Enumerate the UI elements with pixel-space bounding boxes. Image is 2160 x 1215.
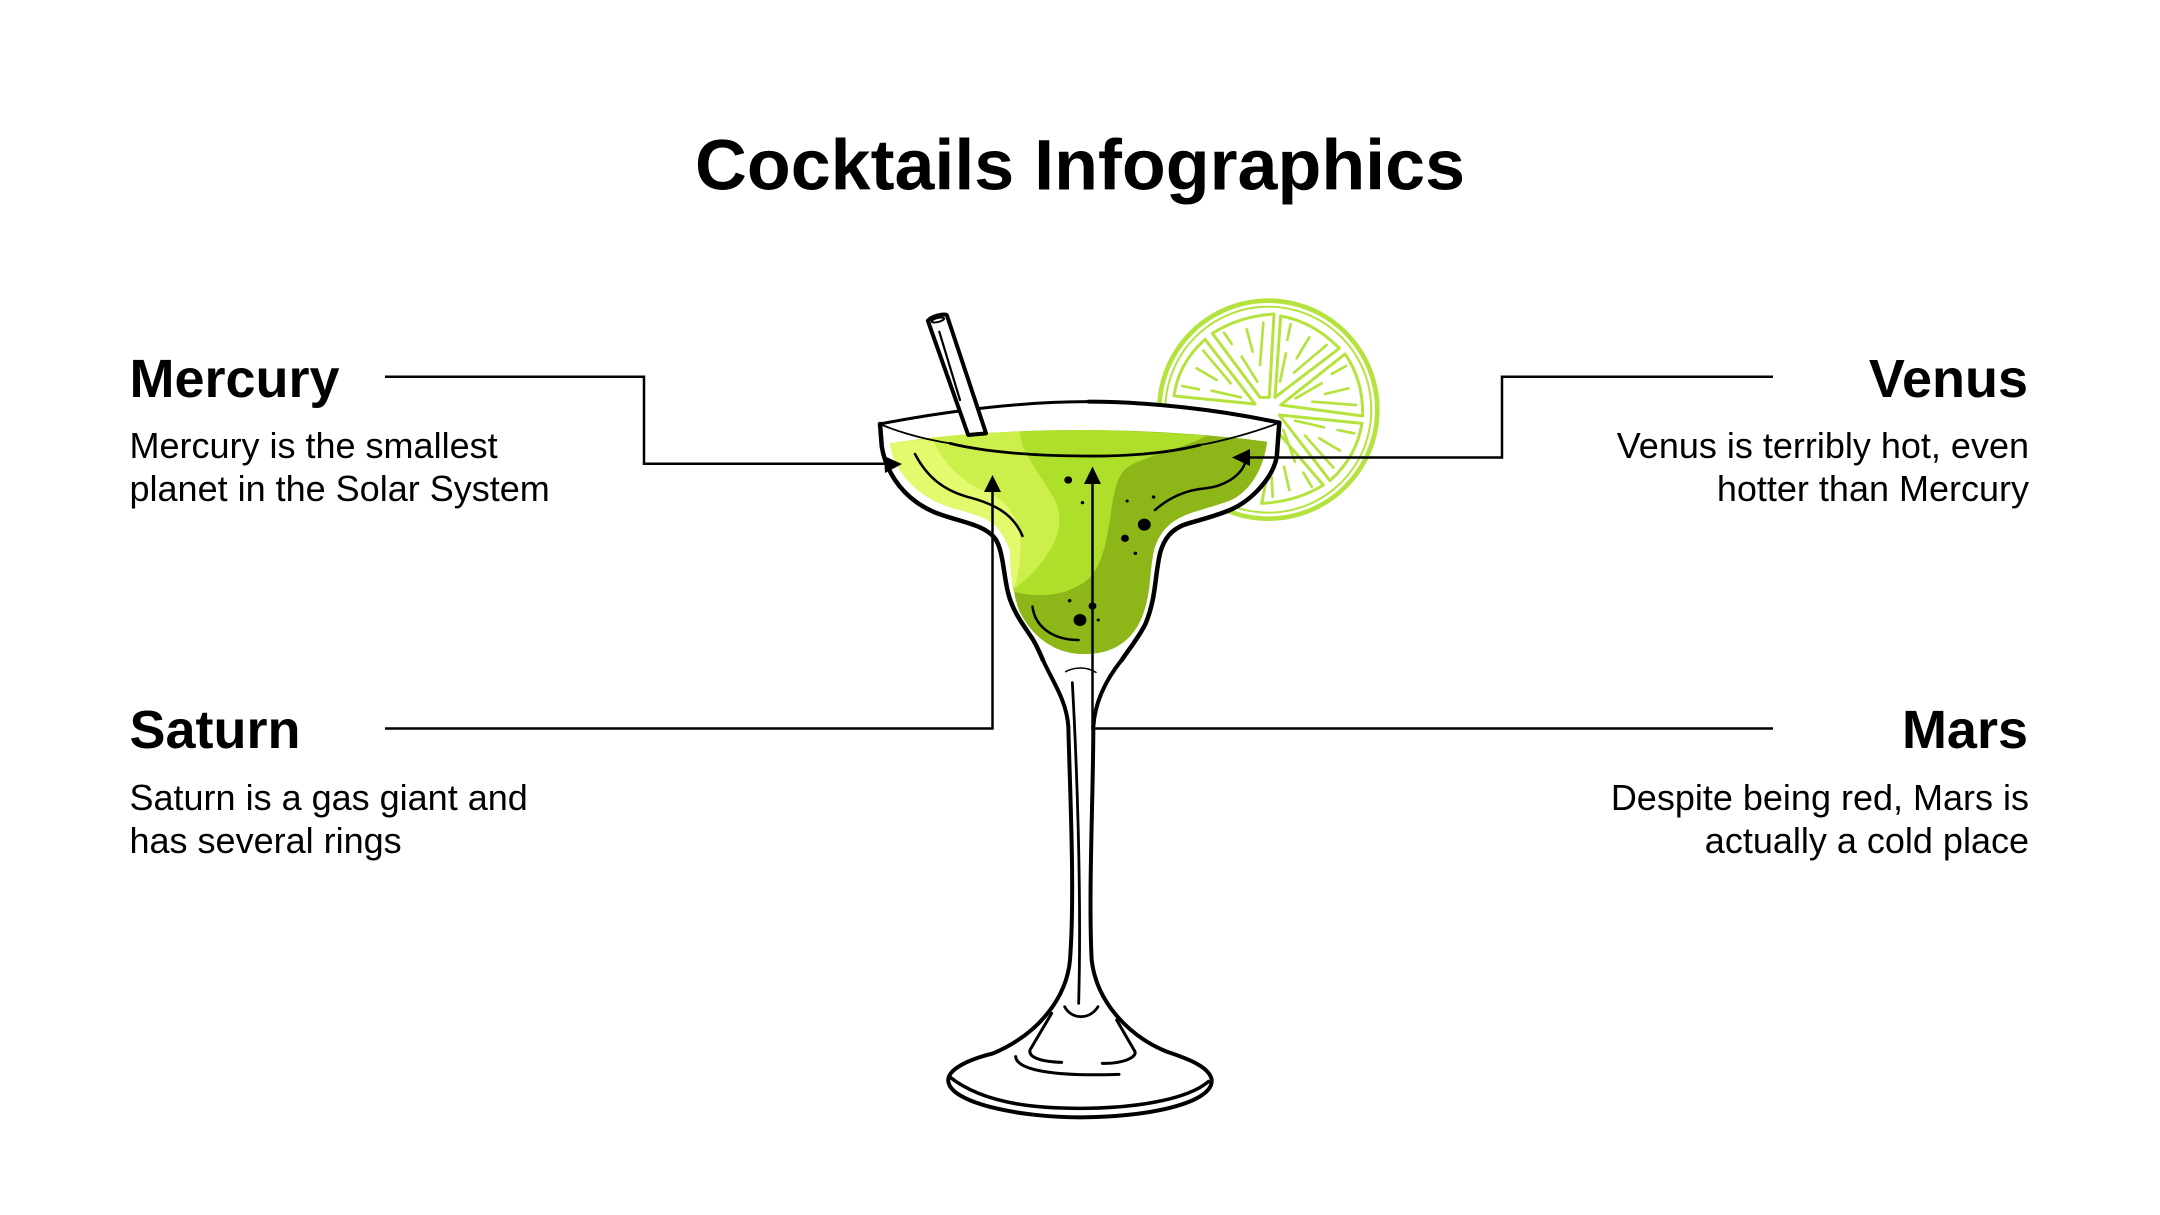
liquid mid layer bbox=[890, 430, 1207, 595]
lime segments bbox=[1174, 314, 1363, 503]
panel: Mars bbox=[1611, 700, 2029, 861]
panel: Saturn bbox=[130, 700, 528, 861]
panel: Mercury bbox=[130, 349, 550, 509]
heading: Mercury: Mercury bbox=[130, 349, 340, 409]
arrow: Mars connector bbox=[1084, 466, 1773, 728]
lime pulp bbox=[1182, 323, 1356, 497]
swirl lines bbox=[915, 454, 1245, 640]
text: Mars description: Despite being red, Mars is bbox=[1611, 777, 2029, 818]
text: Mars description: actually a cold place bbox=[1705, 820, 2029, 861]
icon: glass stem and foot bbox=[948, 660, 1212, 1117]
heading: Saturn: Saturn bbox=[130, 700, 301, 760]
panel: Venus bbox=[1617, 349, 2029, 509]
liquid light layer bbox=[890, 432, 1059, 588]
glass outline bbox=[880, 402, 1279, 660]
glass bowl fill bbox=[880, 402, 1279, 660]
text: Venus description: hotter than Mercury bbox=[1717, 468, 2029, 509]
arrow: Saturn connector bbox=[385, 475, 1001, 728]
heading: Mars: Mars bbox=[1902, 700, 2028, 760]
text: Mercury description: planet in the Solar System bbox=[130, 468, 550, 509]
liquid dark layer bbox=[890, 430, 1267, 654]
arrow: Mercury connector bbox=[385, 377, 902, 473]
liquid lightest layer bbox=[890, 439, 1021, 588]
icon: cocktail glass bowl with liquid bbox=[880, 315, 1279, 660]
icon: lime slice garnish bbox=[1159, 301, 1377, 519]
title: Cocktails Infographics bbox=[695, 126, 1465, 206]
text: Saturn description: Saturn is a gas giant and bbox=[130, 777, 528, 818]
bubbles bbox=[1064, 476, 1155, 626]
straw bbox=[928, 315, 986, 435]
text: Venus description: Venus is terribly hot, even bbox=[1617, 425, 2029, 466]
arrow: Venus connector bbox=[1232, 377, 1773, 466]
text: Saturn description: has several rings bbox=[130, 820, 402, 861]
heading: Venus: Venus bbox=[1869, 349, 2028, 409]
text: Mercury description: Mercury is the smallest bbox=[130, 425, 498, 466]
